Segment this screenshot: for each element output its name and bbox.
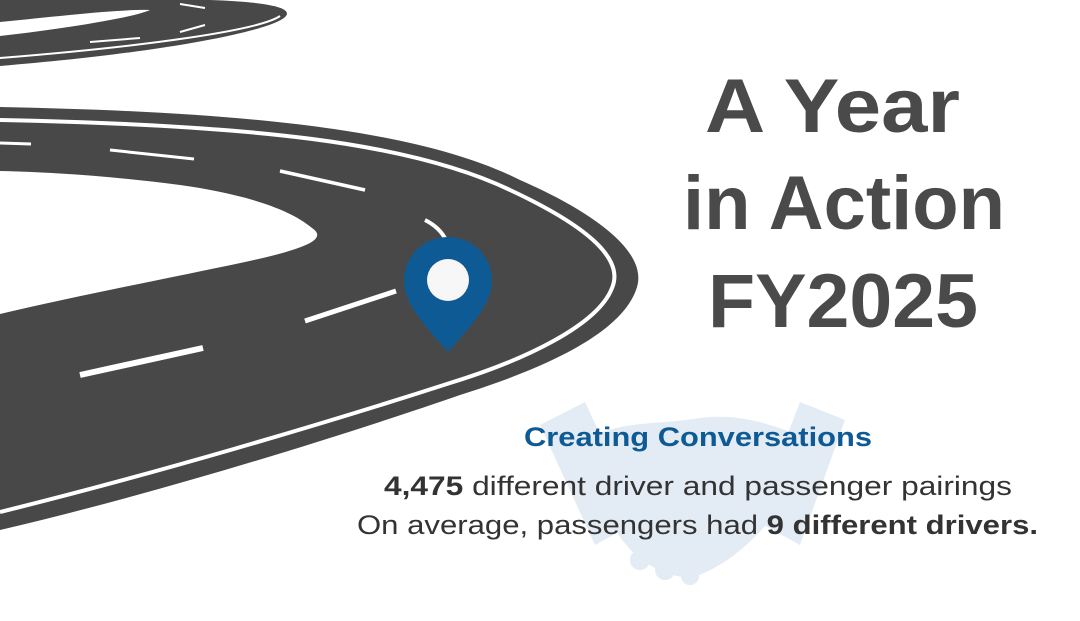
outer white edge line: [0, 120, 614, 512]
center dashes: [0, 143, 446, 375]
title: [683, 64, 1005, 344]
road: top small curve: [0, 0, 287, 66]
title: in Action: [683, 161, 1005, 246]
heading: Creating Conversations: Creating Conversations: [524, 422, 872, 452]
inner white edge line: [0, 181, 298, 304]
icon: location pin: [404, 237, 492, 352]
road: main winding road: [0, 107, 638, 530]
title: A Year: [705, 64, 960, 149]
text block: pairings: 4,475 different driver and passenger pairings: [384, 471, 1012, 501]
text block: average drivers: On average, passengers had 9 different drivers.: [357, 510, 1038, 540]
title: FY2025: [708, 259, 978, 344]
icon: handshake watermark: [540, 402, 845, 585]
